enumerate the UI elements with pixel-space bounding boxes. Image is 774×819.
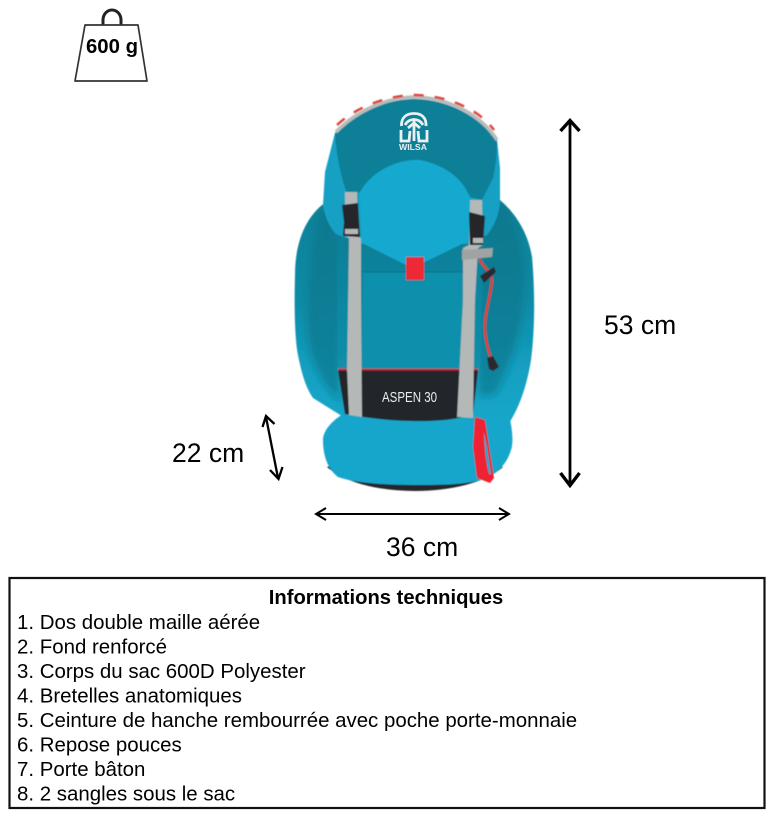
list of features: 6. Repose pouces [17,734,182,756]
list of features: 3. Corps du sac 600D Polyester [17,660,306,683]
list of features: 1. Dos double maille aérée [17,611,260,634]
strap keepers [462,248,493,260]
logo WILSA: WILSA [399,143,427,152]
list of features: 4. Bretelles anatomiques [17,684,242,708]
label: 53 cm: 53 cm [604,310,676,340]
right buckle [469,212,485,245]
arrow: depth 22 cm [262,416,282,479]
panel heading: Informations techniques [269,587,503,609]
left strap [345,192,362,417]
side pockets [295,190,534,432]
top trim [336,97,497,140]
list of features: 7. Porte bâton [17,758,145,781]
list of features: 2. Fond renforcé [17,636,167,658]
label: 36 cm: 36 cm [386,532,458,562]
bottom pouch [323,414,512,491]
red loop [473,417,494,483]
backpack illustration [295,95,534,491]
black panel [338,370,478,421]
red trim [338,368,478,370]
right strap [457,200,483,418]
top flap [335,99,497,200]
arrow: width 36 cm [316,508,509,520]
icon: weight 600 g [75,10,147,81]
panel: technical information [10,578,764,808]
lid sides [323,133,500,244]
red cord [479,259,492,358]
list of features [17,611,577,806]
arrow: height 53 cm [560,120,580,486]
model name: ASPEN 30 [382,389,437,406]
side pocket darker panels [307,202,525,405]
left buckle [342,203,360,237]
front pocket [360,160,470,267]
red tab [406,257,424,280]
mesh pocket [363,272,463,370]
central mesh body [337,225,484,370]
list of features: 8. 2 sangles sous le sac [17,782,235,806]
list of features: 5. Ceinture de hanche rembourrée avec poche porte-monnaie [17,709,577,732]
logo WILSA [399,114,427,152]
label: 22 cm: 22 cm [172,438,244,468]
icon: weight 600 g: 600 g [86,36,138,58]
cord toggles [480,267,496,283]
